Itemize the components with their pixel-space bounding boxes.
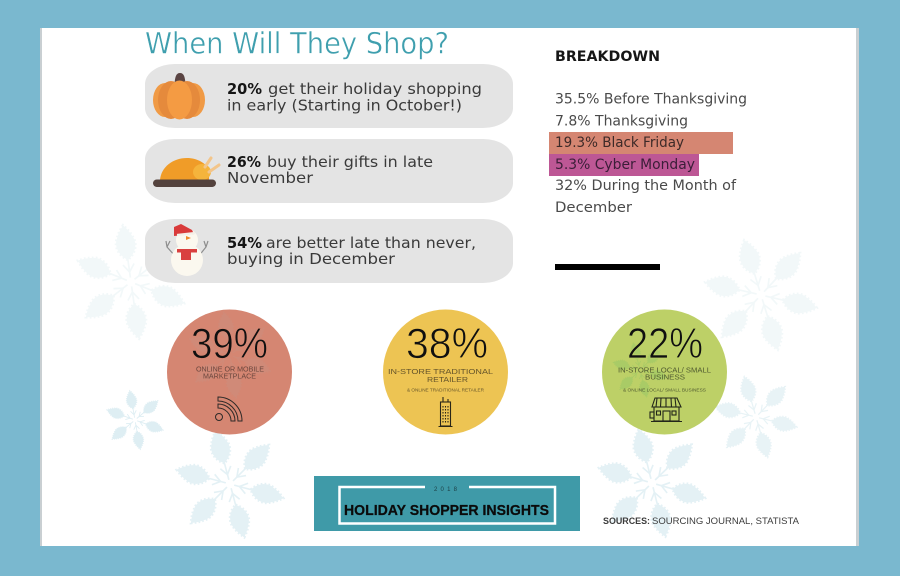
stat circle: in-store traditional bbox=[383, 310, 508, 434]
text: 26 percent: 26% bbox=[227, 153, 261, 171]
banner year: 2018 bbox=[434, 487, 458, 493]
icon: snowman bbox=[166, 224, 208, 276]
breakdown values bbox=[555, 92, 747, 216]
breakdown values: 5.3% Cyber Monday bbox=[555, 157, 695, 173]
sources credit: SOURCING JOURNAL, STATISTA bbox=[652, 516, 800, 527]
title: When Will They Shop? bbox=[145, 26, 449, 60]
text: 26 percent bbox=[227, 153, 433, 187]
text: 20 percent bbox=[227, 80, 482, 114]
panel: late November shoppers bbox=[145, 139, 513, 203]
sources credit: SOURCES: bbox=[603, 516, 650, 527]
breakdown values: December bbox=[555, 200, 632, 216]
panel: December shoppers bbox=[145, 219, 513, 283]
icon: storefront bbox=[650, 398, 682, 422]
text: 26 percent: buy their gifts in late bbox=[267, 153, 433, 171]
icon: office building bbox=[438, 397, 452, 426]
background snowflakes bbox=[69, 218, 830, 551]
stat circle: in-store local small business: BUSINESS bbox=[645, 372, 685, 382]
stat circle: in-store traditional: IN-STORE TRADITIONAL bbox=[388, 367, 493, 376]
divider bar bbox=[555, 264, 660, 270]
stat circle: in-store traditional: & ONLINE TRADITIONAL RETAILER bbox=[407, 388, 484, 392]
stat circle: online or mobile: 39% bbox=[191, 320, 268, 368]
stat circle: online or mobile: ONLINE OR MOBILE bbox=[196, 364, 264, 374]
text: 54 percent: are better late than never, bbox=[266, 234, 476, 252]
text: 20 percent: in early (Starting in October!) bbox=[227, 96, 462, 114]
text: 54 percent bbox=[227, 234, 476, 268]
icon: roast turkey bbox=[153, 158, 219, 187]
highlight: Cyber Monday bbox=[549, 154, 699, 176]
icon: rss signal bbox=[216, 397, 242, 421]
stat circle: in-store local small business: 22% bbox=[627, 320, 703, 368]
banner: holiday shopper insights bbox=[314, 476, 580, 531]
text: 54 percent: buying in December bbox=[227, 250, 396, 268]
heading: breakdown: BREAKDOWN bbox=[555, 49, 660, 65]
stat circle: in-store traditional: 38% bbox=[406, 320, 488, 368]
breakdown values: 7.8% Thanksgiving bbox=[555, 114, 688, 130]
banner frame bbox=[340, 487, 555, 524]
stat circle: in-store local small business bbox=[602, 310, 727, 434]
text: 54 percent: 54% bbox=[227, 234, 262, 252]
text: 20 percent: get their holiday shopping bbox=[268, 80, 482, 98]
stat circle: in-store traditional: RETAILER bbox=[427, 375, 469, 384]
panel: early shoppers bbox=[145, 64, 513, 128]
stat circle: in-store local small business: IN-STORE LOCAL/ SMALL bbox=[618, 366, 711, 374]
text: 26 percent: November bbox=[227, 169, 314, 187]
breakdown values: 35.5% Before Thanksgiving bbox=[555, 92, 747, 108]
icon: pumpkin bbox=[153, 73, 205, 120]
breakdown values: 32% During the Month of bbox=[555, 178, 737, 194]
banner heading: HOLIDAY SHOPPER INSIGHTS bbox=[344, 503, 549, 519]
breakdown values: 19.3% Black Friday bbox=[555, 135, 684, 151]
stat circle: online or mobile: MARKETPLACE bbox=[203, 372, 256, 380]
stat circle: in-store local small business: & ONLINE LOCAL/ SMALL BUSINESS bbox=[623, 388, 706, 392]
panel: breakdown list bbox=[549, 49, 747, 270]
highlight: Black Friday bbox=[549, 132, 733, 154]
stat circle: online or mobile bbox=[167, 307, 292, 434]
text: 20 percent: 20% bbox=[227, 80, 262, 98]
